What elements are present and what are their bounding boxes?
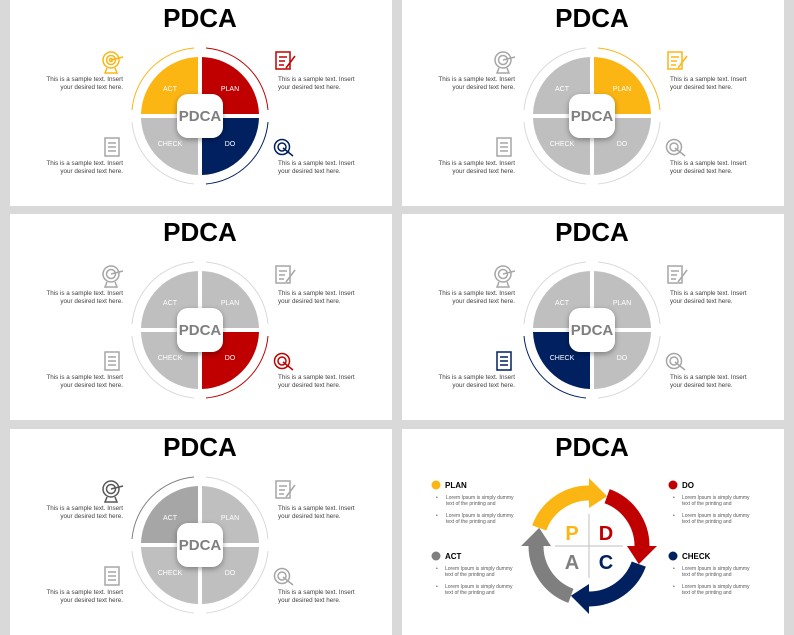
ring arcs xyxy=(524,262,660,398)
legend: plan: • xyxy=(436,513,438,519)
slide 2 xyxy=(402,0,784,206)
texts: This is a sample text. Insert xyxy=(670,160,747,167)
slide 5 xyxy=(10,429,392,635)
quadrants: DO xyxy=(225,141,236,148)
cycle arrows: A xyxy=(565,552,579,574)
slide 4 xyxy=(402,214,784,420)
texts: This is a sample text. Insert xyxy=(278,589,355,596)
ring arcs xyxy=(524,48,660,184)
quadrants: PLAN xyxy=(221,86,239,93)
title: PDCA xyxy=(163,432,237,462)
legend: check xyxy=(668,552,750,596)
texts: your desired text here. xyxy=(60,597,123,604)
right texts: your desired text here. xyxy=(278,84,341,91)
title: PDCA xyxy=(555,3,629,33)
texts: This is a sample text. Insert xyxy=(46,374,123,381)
legend: act: • xyxy=(436,584,438,590)
legend: plan xyxy=(432,480,514,525)
quadrants: CHECK xyxy=(550,355,575,362)
texts: This is a sample text. Insert xyxy=(438,374,515,381)
texts: This is a sample text. Insert xyxy=(46,589,123,596)
quadrants: ACT xyxy=(555,86,570,93)
quadrants: PLAN xyxy=(221,300,239,307)
quadrants: CHECK xyxy=(158,570,183,577)
legend: do: Lorem Ipsum is simply dummy xyxy=(682,513,750,519)
right texts: your desired text here. xyxy=(278,168,341,175)
legend: plan: Lorem Ipsum is simply dummy xyxy=(446,495,514,501)
legend: act: ACT xyxy=(445,552,462,561)
title: PDCA xyxy=(555,217,629,247)
quadrants: PLAN xyxy=(613,300,631,307)
legend: plan: PLAN xyxy=(445,481,467,490)
legend: do: DO xyxy=(682,481,694,490)
cycle arrows: P xyxy=(565,523,579,545)
legend: plan: text of the printing and xyxy=(446,519,496,525)
quadrants xyxy=(141,271,259,389)
left texts: your desired text here. xyxy=(60,84,123,91)
legend: act: text of the printing and xyxy=(445,572,495,578)
icons xyxy=(103,266,295,370)
left texts: This is a sample text. Insert xyxy=(46,76,123,83)
icons xyxy=(103,52,295,156)
ring arcs xyxy=(132,48,268,184)
right texts xyxy=(278,76,355,175)
quadrants: ACT xyxy=(163,86,178,93)
legend: check: Lorem Ipsum is simply dummy xyxy=(682,584,750,590)
texts xyxy=(46,505,355,604)
slide 6 xyxy=(402,429,784,635)
texts: your desired text here. xyxy=(60,513,123,520)
texts xyxy=(438,76,747,175)
texts: your desired text here. xyxy=(278,513,341,520)
texts: your desired text here. xyxy=(278,298,341,305)
legend: check: text of the printing and xyxy=(682,590,732,596)
quadrants: CHECK xyxy=(158,355,183,362)
legend: do: text of the printing and xyxy=(682,519,732,525)
texts: your desired text here. xyxy=(278,597,341,604)
legend: act: text of the printing and xyxy=(445,590,495,596)
quadrants xyxy=(533,57,651,175)
quadrants: CHECK xyxy=(158,141,183,148)
quadrants: DO xyxy=(225,355,236,362)
texts: This is a sample text. Insert xyxy=(670,76,747,83)
texts: This is a sample text. Insert xyxy=(438,290,515,297)
quadrants: PLAN xyxy=(221,515,239,522)
legend: do xyxy=(668,480,750,525)
legend: act: Lorem Ipsum is simply dummy xyxy=(445,566,513,572)
quadrants xyxy=(141,57,259,175)
left texts: your desired text here. xyxy=(60,168,123,175)
legend: act: Lorem Ipsum is simply dummy xyxy=(445,584,513,590)
quadrants: PDCA xyxy=(179,108,221,125)
quadrants: DO xyxy=(617,141,628,148)
texts: your desired text here. xyxy=(670,298,733,305)
quadrants: ACT xyxy=(163,300,178,307)
quadrants: PDCA xyxy=(179,322,221,339)
left texts xyxy=(46,76,123,175)
texts xyxy=(46,290,355,389)
quadrants: PDCA xyxy=(179,537,221,554)
texts: your desired text here. xyxy=(452,382,515,389)
legend: act xyxy=(432,552,513,596)
texts: This is a sample text. Insert xyxy=(46,290,123,297)
texts: your desired text here. xyxy=(670,382,733,389)
legend: do: • xyxy=(673,495,675,501)
texts: This is a sample text. Insert xyxy=(46,505,123,512)
legend: act: • xyxy=(436,566,438,572)
icons xyxy=(495,266,687,370)
texts: your desired text here. xyxy=(452,84,515,91)
legend: check: text of the printing and xyxy=(682,572,732,578)
texts: your desired text here. xyxy=(452,298,515,305)
right texts: This is a sample text. Insert xyxy=(278,160,355,167)
texts: your desired text here. xyxy=(278,382,341,389)
slide 1 xyxy=(10,0,392,206)
quadrants: PDCA xyxy=(571,108,613,125)
quadrants: ACT xyxy=(163,515,178,522)
texts: This is a sample text. Insert xyxy=(438,76,515,83)
quadrants xyxy=(533,271,651,389)
legend: plan: • xyxy=(436,495,438,501)
legend: check: CHECK xyxy=(682,552,711,561)
texts: This is a sample text. Insert xyxy=(670,374,747,381)
quadrants xyxy=(141,486,259,604)
slide 3 xyxy=(10,214,392,420)
legend: plan: text of the printing and xyxy=(446,501,496,507)
quadrants: PDCA xyxy=(571,322,613,339)
texts xyxy=(438,290,747,389)
title: PDCA xyxy=(163,3,237,33)
legend: check: • xyxy=(673,566,675,572)
quadrants: PLAN xyxy=(613,86,631,93)
title: PDCA xyxy=(163,217,237,247)
texts: This is a sample text. Insert xyxy=(278,505,355,512)
texts: This is a sample text. Insert xyxy=(438,160,515,167)
right texts: This is a sample text. Insert xyxy=(278,76,355,83)
legend: plan: Lorem Ipsum is simply dummy xyxy=(446,513,514,519)
legend: do: text of the printing and xyxy=(682,501,732,507)
legend: check: Lorem Ipsum is simply dummy xyxy=(682,566,750,572)
legend: do: • xyxy=(673,513,675,519)
cycle arrows xyxy=(521,478,657,614)
ring arcs xyxy=(132,262,268,398)
legend: do: Lorem Ipsum is simply dummy xyxy=(682,495,750,501)
quadrants: ACT xyxy=(555,300,570,307)
quadrants: DO xyxy=(617,355,628,362)
texts: your desired text here. xyxy=(670,168,733,175)
texts: This is a sample text. Insert xyxy=(670,290,747,297)
cycle arrows: C xyxy=(599,552,613,574)
texts: This is a sample text. Insert xyxy=(278,374,355,381)
icons xyxy=(103,481,295,585)
texts: your desired text here. xyxy=(60,382,123,389)
cycle arrows: D xyxy=(599,523,613,545)
legend: check: • xyxy=(673,584,675,590)
texts: This is a sample text. Insert xyxy=(278,290,355,297)
icons xyxy=(495,52,687,156)
left texts: This is a sample text. Insert xyxy=(46,160,123,167)
ring arcs xyxy=(132,477,268,613)
texts: your desired text here. xyxy=(670,84,733,91)
texts: your desired text here. xyxy=(60,298,123,305)
quadrants: CHECK xyxy=(550,141,575,148)
texts: your desired text here. xyxy=(452,168,515,175)
title: PDCA xyxy=(555,432,629,462)
quadrants: DO xyxy=(225,570,236,577)
